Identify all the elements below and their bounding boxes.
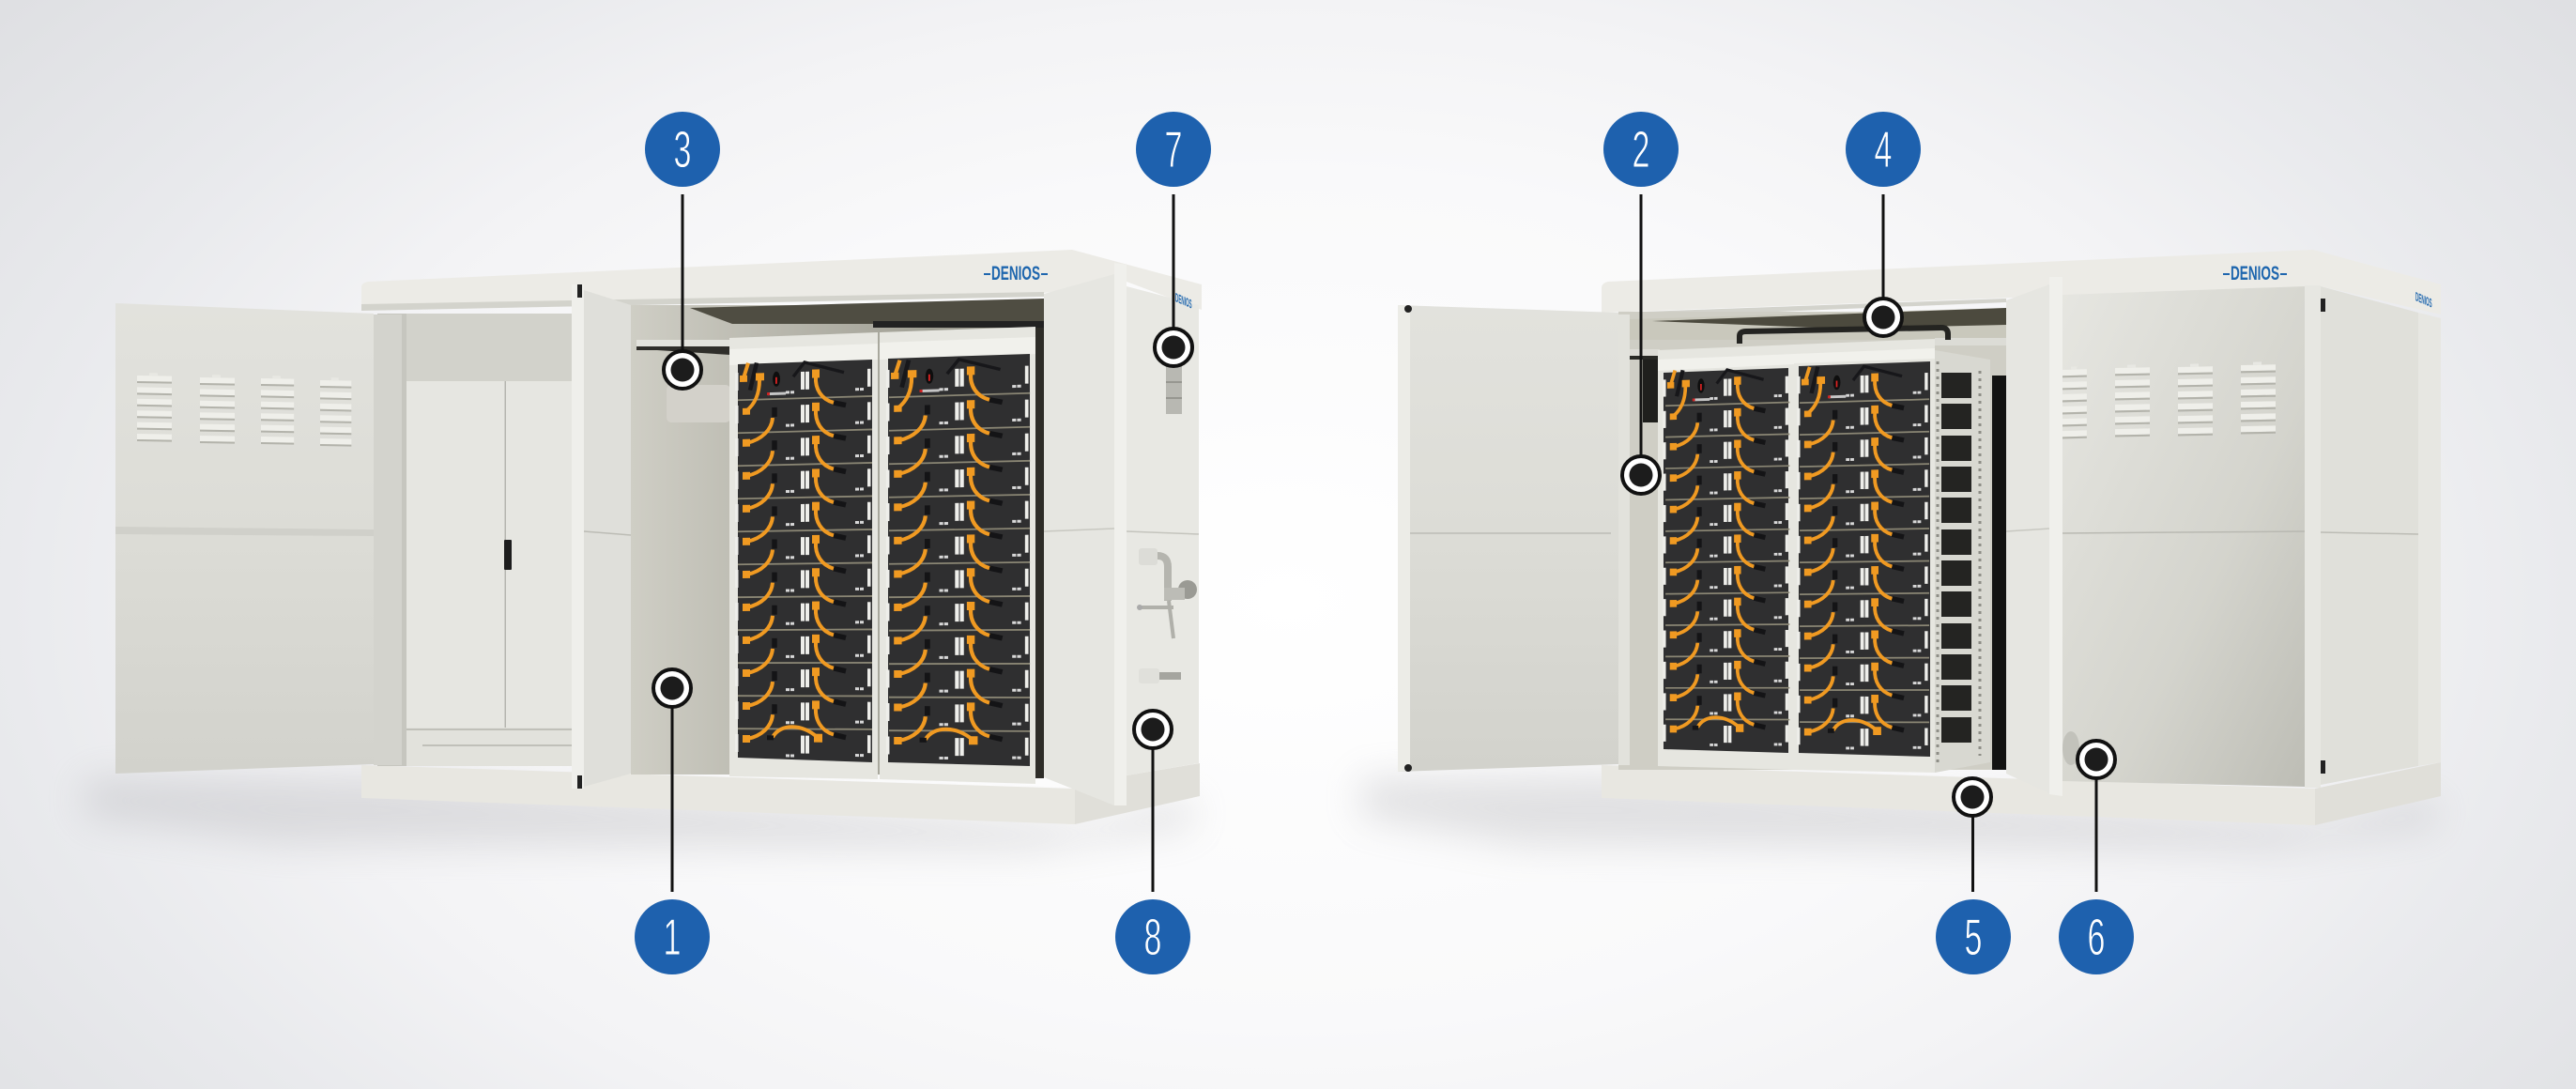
logo: DENIOS front: DENIOS: [2231, 263, 2279, 284]
callout 5: 5: [1965, 909, 1982, 966]
callout 3: 3: [674, 121, 691, 178]
front panels: [2062, 286, 2305, 787]
centre door: [572, 284, 631, 789]
logo: DENIOS front: DENIOS: [991, 263, 1040, 284]
battery rack 2: [880, 327, 1035, 784]
roof: [1602, 250, 2441, 318]
left compartment: [377, 314, 572, 766]
device box: [667, 385, 730, 422]
open left door: [1398, 305, 1618, 772]
floor shadow: left unit: [84, 775, 1192, 850]
logo: DENIOS front: [984, 263, 1048, 284]
open left door: [115, 303, 402, 774]
battery rack 2: [1794, 339, 1935, 773]
callout 5: [1936, 778, 2011, 974]
side label plate: [1166, 366, 1182, 414]
front vents: [2062, 361, 2276, 439]
callout 4: 4: [1875, 121, 1892, 178]
inner door: [2006, 277, 2062, 796]
base plinth: [1602, 762, 2441, 825]
roof: [361, 250, 1202, 311]
interior back wall: [631, 305, 1044, 775]
floor shadow: right unit: [1361, 775, 2436, 850]
cable stub: [1139, 668, 1181, 683]
inner door: [1044, 263, 1127, 805]
callout 2: 2: [1633, 121, 1649, 178]
ceiling and service pipe: [690, 299, 1044, 778]
leader lines and markers: [635, 112, 2134, 974]
left container unit: [115, 250, 1202, 824]
callout 7: [1136, 112, 1211, 366]
logo: DENIOS front: [2223, 263, 2287, 284]
right container unit: DENIOS: [2415, 289, 2432, 311]
right container unit: [1398, 250, 2441, 825]
corner post and side panel: [2305, 285, 2441, 788]
callout 7: 7: [1165, 121, 1182, 178]
callout 6: 6: [2088, 909, 2105, 966]
callout 1: 1: [664, 909, 681, 966]
interior: [1618, 308, 2006, 770]
cable gland assembly: [1137, 548, 1197, 638]
right side wall: [1127, 286, 1199, 775]
callout 3: [645, 112, 720, 389]
door vents: [137, 373, 351, 447]
callout 8: 8: [1144, 909, 1161, 966]
left container unit: DENIOS: [1175, 290, 1192, 312]
service pipe: [1740, 328, 1948, 344]
callout 6: [2059, 741, 2134, 974]
callout 4: [1846, 112, 1921, 336]
callout 1: [635, 669, 710, 974]
callout 2: [1603, 112, 1679, 494]
shelf bar: [636, 340, 730, 355]
battery rack 1: [729, 332, 878, 779]
rack side frame: [1935, 350, 1990, 773]
callout 8: [1115, 711, 1190, 974]
cabinet plinth: [406, 728, 572, 766]
battery rack 1: [1658, 345, 1794, 770]
electrical cabinet: [406, 381, 572, 728]
base plinth: [361, 763, 1200, 824]
